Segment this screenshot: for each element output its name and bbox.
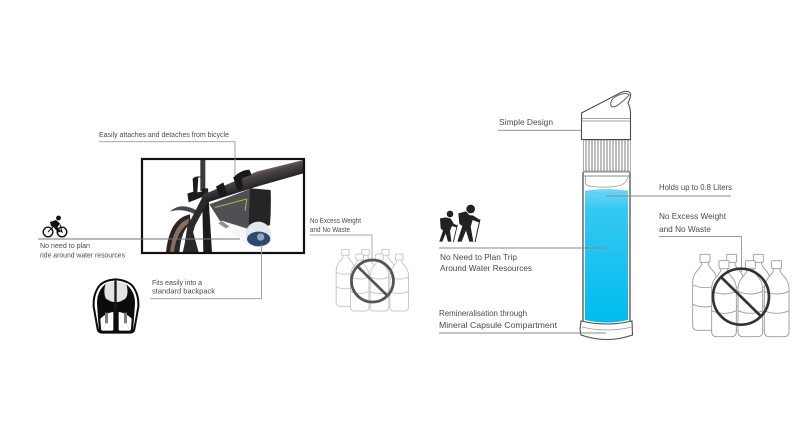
label: no need to plan trip	[439, 248, 606, 273]
label: simple design: Simple Design	[499, 117, 553, 127]
bag with velcro straps	[209, 170, 271, 235]
label: no excess weight, left: No Excess Weight	[310, 216, 362, 225]
label: remineralisation	[439, 308, 606, 333]
label: no excess weight, right	[659, 211, 742, 272]
label: no excess weight, right: and No Waste	[659, 224, 711, 234]
ribbed neck	[584, 140, 630, 171]
bicycle top tube	[203, 160, 303, 202]
small hiker	[439, 211, 457, 242]
label: no need to plan ride	[38, 239, 240, 260]
label: no excess weight, left	[310, 216, 372, 262]
bicycle wheel and fender	[166, 206, 199, 252]
large hiker	[457, 205, 480, 242]
label: attaches and detaches: Easily attaches and detaches from bicycle	[99, 130, 229, 139]
label: no need to plan trip: No Need to Plan Trip	[440, 252, 517, 262]
label: no excess weight, right: No Excess Weight	[659, 211, 727, 221]
label: simple design	[498, 117, 606, 130]
product bottle	[580, 91, 632, 340]
icon: cyclist	[43, 216, 67, 237]
label: fits into backpack	[150, 245, 262, 299]
bottle water fill	[585, 189, 628, 322]
label: fits into backpack: Fits easily into a	[152, 278, 203, 287]
bottle body	[583, 172, 630, 322]
icon: backpack	[94, 279, 138, 333]
label: fits into backpack: standard backpack	[152, 286, 215, 296]
label: no excess weight, left: and No Waste	[310, 225, 350, 234]
panel: bicycle bag photo	[142, 159, 304, 253]
icon: crossed bottles, left	[336, 249, 408, 311]
icon: hikers	[439, 205, 480, 242]
icon: crossed bottles, right	[693, 254, 789, 337]
label: holds up to 0.8 liters	[606, 182, 732, 196]
water bottle in bag	[218, 221, 271, 248]
cap	[582, 91, 631, 140]
label: no need to plan ride: ride around water resources	[40, 250, 125, 260]
label: no need to plan trip: Around Water Resources	[440, 263, 532, 273]
label: holds up to 0.8 liters: Holds up to 0.8 Liters	[659, 182, 732, 192]
base capsule compartment	[580, 321, 632, 340]
label: remineralisation: Mineral Capsule Compartment	[439, 320, 558, 330]
label: attaches and detaches	[99, 130, 235, 176]
label: remineralisation: Remineralisation through	[439, 308, 527, 318]
label: no need to plan ride: No need to plan	[40, 241, 90, 250]
bicycle frame and seat post	[183, 159, 212, 252]
